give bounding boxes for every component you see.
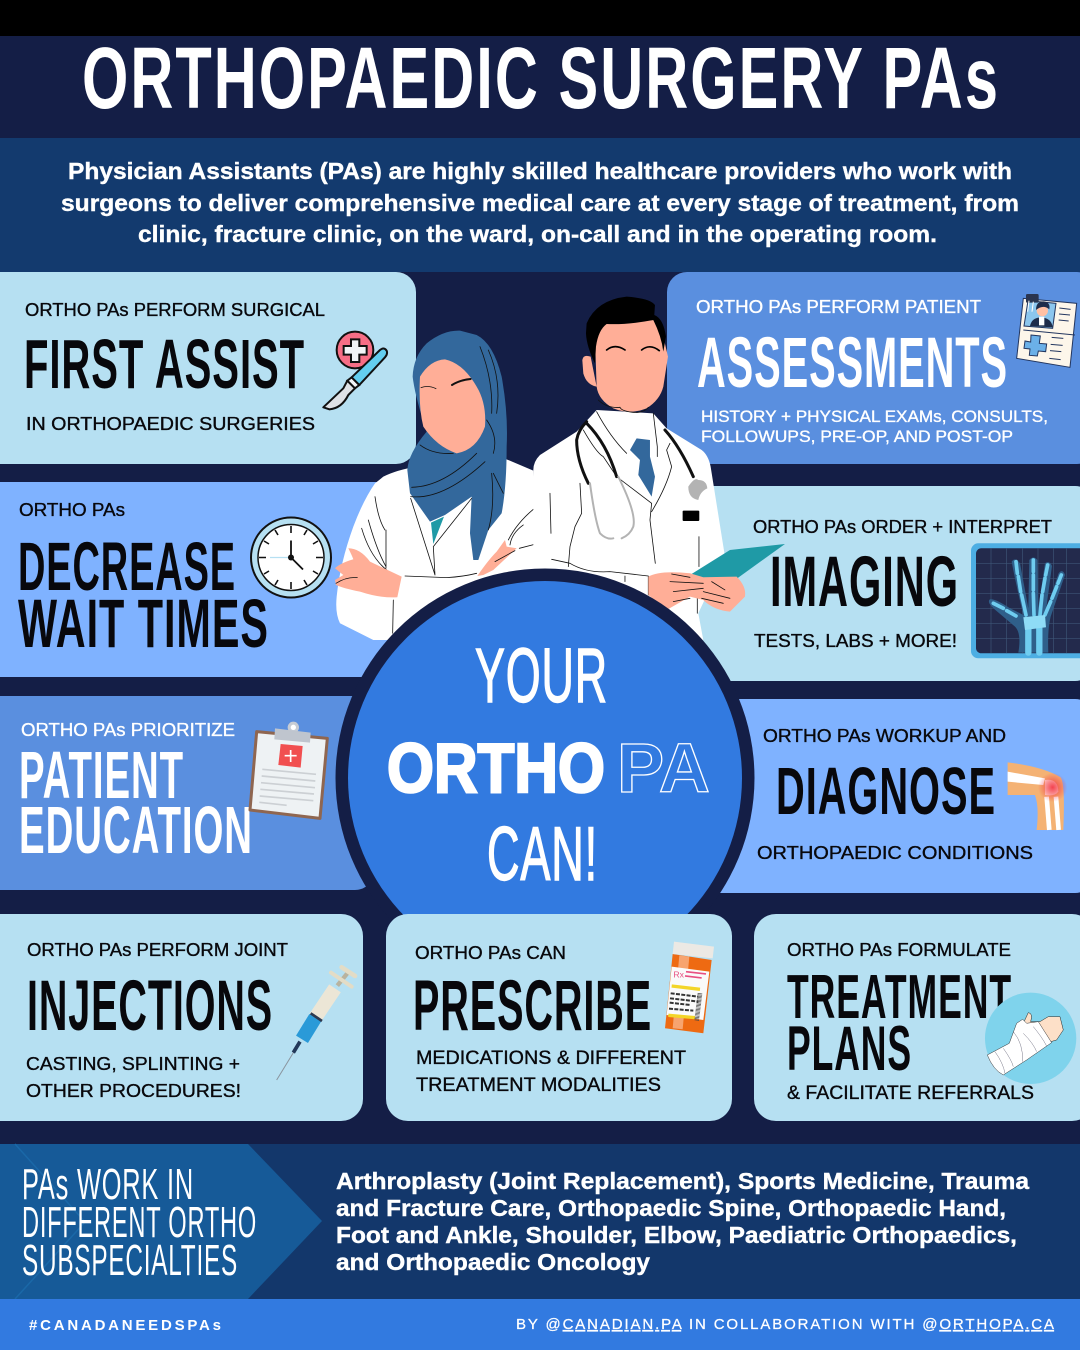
panel: first assist: ORTHO PAs PERFORM SURGICAL <box>25 300 325 320</box>
arrow: subspecialties heading: SUBSPECIALTIES <box>22 1236 238 1285</box>
panel: first assist: FIRST ASSIST <box>24 325 305 403</box>
panel: injections: INJECTIONS <box>27 967 273 1046</box>
icon: clipboard <box>250 722 327 818</box>
panel: assessments: FOLLOWUPS, PRE-OP, AND POST-OP <box>701 427 1013 446</box>
panel: treatment plans: PLANS <box>787 1014 912 1084</box>
panel: decrease wait times: WAIT TIMES <box>18 585 269 662</box>
subspecialties list: and Orthopaedic Oncology <box>336 1249 650 1275</box>
icon: hand x-ray <box>971 543 1080 658</box>
panel: injections <box>0 914 363 1121</box>
arrow: subspecialties heading <box>0 1144 322 1299</box>
panel: assessments: ORTHO PAs PERFORM PATIENT <box>696 297 981 317</box>
intro text band: clinic, fracture clinic, on the ward, on-call and in the operating room. <box>138 221 937 247</box>
panel: first assist: IN ORTHOPAEDIC SURGERIES <box>26 414 315 434</box>
panel: imaging: ORTHO PAs ORDER + INTERPRET <box>753 517 1052 537</box>
panel: decrease wait times: DECREASE <box>18 528 236 605</box>
footer band: BY @CANADIAN.PA IN COLLABORATION WITH @ORTHOPA.CA <box>516 1316 1054 1333</box>
central circle: your ortho PA can: CAN! <box>487 812 598 897</box>
icon: scalpel with medical cross <box>323 332 387 409</box>
panel: prescribe <box>386 914 732 1121</box>
icon: prescription bottle: Rx <box>673 969 685 979</box>
intro text band: surgeons to deliver comprehensive medical care at every stage of treatment, from <box>61 190 1019 216</box>
panel: prescribe: MEDICATIONS & DIFFERENT <box>416 1048 686 1069</box>
panel: prescribe: PRESCRIBE <box>413 967 652 1046</box>
panel: injections: CASTING, SPLINTING + <box>26 1054 240 1074</box>
icon: knee joint <box>1008 762 1067 830</box>
icon: patient ID card <box>1017 294 1077 367</box>
panel: first assist <box>0 272 416 464</box>
intro text band: Physician Assistants (PAs) are highly skilled healthcare providers who work with <box>68 158 1012 184</box>
panel: decrease wait times: ORTHO PAs <box>19 500 125 520</box>
panel: imaging: TESTS, LABS + MORE! <box>754 631 957 651</box>
panel: treatment plans: & FACILITATE REFERRALS <box>787 1083 1034 1104</box>
icon: syringe <box>277 967 355 1080</box>
panel: injections: ORTHO PAs PERFORM JOINT <box>27 940 288 960</box>
footer band <box>0 1299 1080 1350</box>
human figures <box>335 297 785 640</box>
panel: diagnose <box>650 699 1080 893</box>
panel: prescribe: TREATMENT MODALITIES <box>416 1075 661 1096</box>
central circle: your ortho PA can: PA <box>617 729 710 807</box>
icon: prescription bottle <box>665 942 714 1033</box>
arrow: subspecialties heading: DIFFERENT ORTHO <box>22 1198 257 1247</box>
illustration: female PA in hijab <box>335 331 537 640</box>
panel: decrease wait times <box>0 482 400 677</box>
subspecialties list: and Fracture Care, Orthopaedic Spine, Orthopaedic Hand, <box>336 1195 1006 1221</box>
panel: patient education: ORTHO PAs PRIORITIZE <box>21 720 235 740</box>
panel: diagnose: ORTHOPAEDIC CONDITIONS <box>757 843 1033 863</box>
panel: assessments <box>667 272 1080 464</box>
panel: patient education <box>0 696 375 890</box>
panel: treatment plans <box>754 914 1080 1121</box>
panel: diagnose: ORTHO PAs WORKUP AND <box>763 726 1006 746</box>
central circle: your ortho PA can <box>336 568 754 988</box>
panel: injections: OTHER PROCEDURES! <box>26 1081 241 1101</box>
central circle: your ortho PA can: YOUR <box>475 633 608 719</box>
subspecialties list: Foot and Ankle, Shoulder, Elbow, Paediatric Orthopaedics, <box>336 1222 1017 1248</box>
panel: imaging <box>650 486 1080 681</box>
illustration: male PA with stethoscope <box>533 297 785 640</box>
intro text band <box>0 138 1080 272</box>
subspecialties list <box>336 1168 1029 1275</box>
arrow: subspecialties heading: PAs WORK IN <box>22 1160 194 1209</box>
icon: bandaged arm <box>985 993 1076 1084</box>
footer band: #CANADANEEDSPAs <box>29 1317 221 1334</box>
subspecialties band <box>0 1144 1080 1299</box>
icon: clock <box>251 518 331 598</box>
panel: patient education: PATIENT <box>19 738 184 813</box>
subspecialties list: Arthroplasty (Joint Replacement), Sports Medicine, Trauma <box>336 1168 1029 1194</box>
central circle: your ortho PA can: ORTHO <box>387 729 605 807</box>
panel: assessments: HISTORY + PHYSICAL EXAMs, CONSULTS, <box>701 407 1048 426</box>
panel: treatment plans: ORTHO PAs FORMULATE <box>787 940 1011 960</box>
panel: prescribe: ORTHO PAs CAN <box>415 943 566 963</box>
panel: patient education: EDUCATION <box>19 793 253 868</box>
